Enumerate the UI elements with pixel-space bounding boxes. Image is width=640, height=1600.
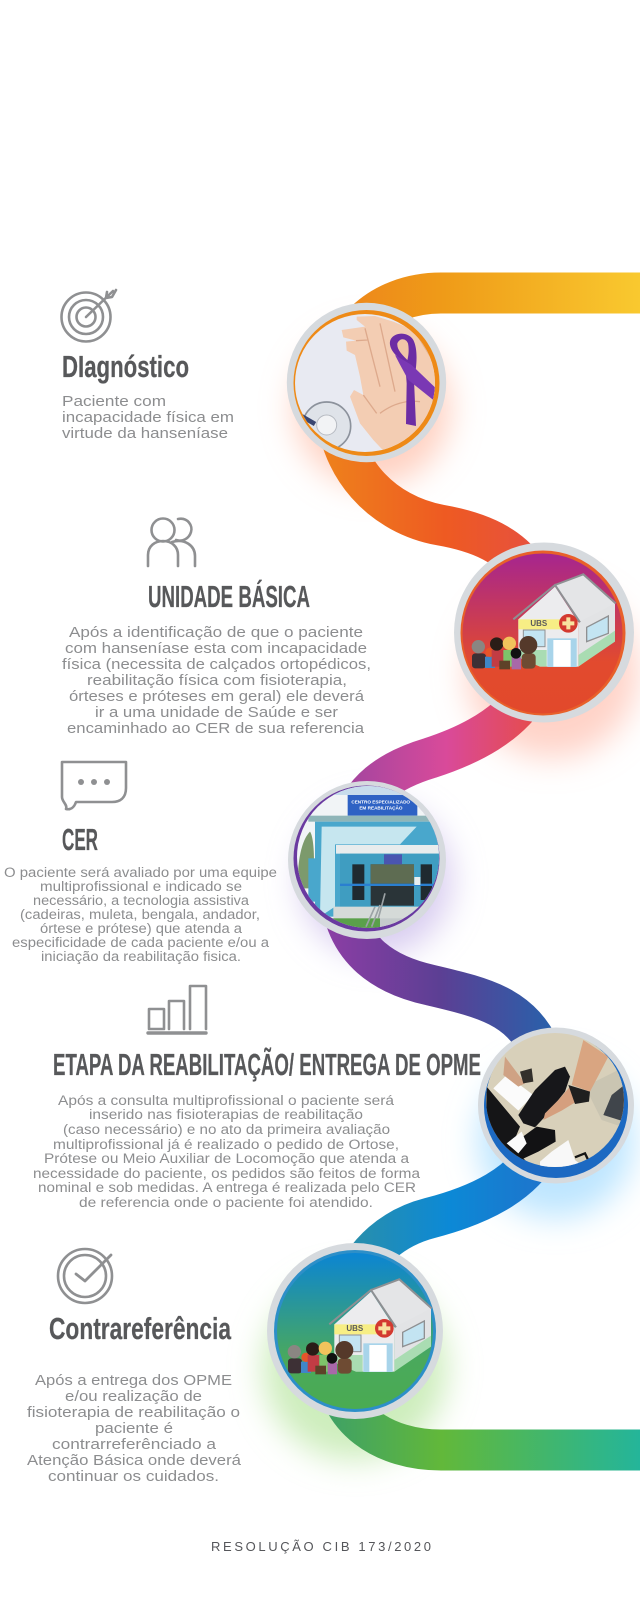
description: Após a identificação de que o paciente [69, 624, 363, 641]
icon: speech bubble [62, 762, 126, 809]
icon: two people [148, 518, 195, 566]
description [27, 1372, 242, 1485]
description: necessidade do paciente, os pedidos são feitos de forma [33, 1166, 421, 1181]
description [4, 865, 277, 964]
disc 3: CER building photo [288, 781, 447, 939]
infographic [4, 272, 640, 1554]
description: Após a consulta multiprofissional o paciente será [58, 1093, 395, 1108]
heading: CER [62, 822, 98, 857]
description: especificidade de cada paciente e/ou a [12, 935, 270, 950]
soft glows behind the discs [263, 330, 638, 1460]
description: necessário, a tecnologia assistiva [33, 893, 250, 908]
description: e/ou realização de [65, 1388, 202, 1405]
description [62, 624, 371, 737]
disc 2: UBS house on purple-red [454, 542, 634, 722]
description: inserido nas fisioterapias de reabilitação [89, 1107, 363, 1122]
section: CER [4, 762, 277, 964]
description: órtese e prótese) que atenda a [40, 921, 243, 936]
disc 1: hand with purple ribbon photo [287, 303, 446, 462]
heading: Contrareferência [49, 1311, 232, 1346]
section: Contrareferência [27, 1249, 242, 1485]
winding gradient path [335, 293, 640, 1450]
description: física (necessita de calçados ortopédicos, [62, 656, 371, 673]
description: encaminhado ao CER de sua referencia [67, 720, 365, 737]
description [33, 1093, 421, 1210]
description: multiprofissional e indicado se [40, 879, 242, 894]
description: (cadeiras, muleta, bengala, andador, [20, 907, 260, 922]
description: contrarreferênciado a [52, 1436, 217, 1453]
description: reabilitação física com fisioterapia, [87, 672, 347, 689]
description: com hanseníase esta com incapacidade [65, 640, 367, 657]
description: fisioterapia de reabilitação o [27, 1404, 240, 1421]
section: Unidade Básica [62, 518, 371, 737]
house with people [472, 574, 616, 669]
description: órteses e próteses em geral) ele deverá [69, 688, 365, 705]
heading: DIagnóstico [62, 349, 189, 384]
icon: bar chart [148, 986, 206, 1033]
icon: check in circle [58, 1249, 112, 1303]
description: O paciente será avaliado por uma equipe [4, 865, 277, 880]
disc 3: CER building photo: CENTRO ESPECIALIZADO [351, 800, 410, 805]
description [62, 393, 234, 442]
footer source: RESOLUÇÃO CIB 173/2020 [211, 1539, 431, 1554]
description: paciente é [95, 1420, 173, 1437]
disc 3: CER building photo: EM REABILITAÇÃO [359, 804, 403, 810]
description: virtude da hanseníase [62, 425, 228, 442]
house with people: UBS [530, 619, 548, 628]
description: ir a uma unidade de Saúde e ser [95, 704, 338, 721]
description: (caso necessário) e no ato da primeira avaliação [63, 1122, 390, 1137]
disc 4: orthopedic shoe photo [478, 1028, 634, 1184]
disc 5: UBS house on blue-green [267, 1243, 443, 1419]
description: multiprofissional já é realizado o pedido de Ortose, [53, 1137, 399, 1152]
description: continuar os cuidados. [48, 1468, 219, 1485]
icon: target with arrow [62, 290, 116, 342]
section: Etapa da reabilitação [33, 986, 481, 1210]
description: incapacidade física em [62, 409, 234, 426]
description: iniciação da reabilitação fisica. [41, 949, 241, 964]
description: nominal e sob medidas. A entrega é realizada pelo CER [38, 1180, 416, 1195]
description: Atenção Básica onde deverá [27, 1452, 242, 1469]
heading: UNIDADE BÁSICA [148, 579, 310, 614]
description: Paciente com [62, 393, 166, 410]
house with people: UBS [346, 1324, 364, 1333]
description: de referencia onde o paciente foi atendido. [79, 1195, 373, 1210]
house with people [288, 1279, 432, 1374]
section: Diagnóstico [62, 290, 234, 442]
description: Após a entrega dos OPME [35, 1372, 232, 1389]
description: Prótese ou Meio Auxiliar de Locomoção que atenda a [44, 1151, 410, 1166]
